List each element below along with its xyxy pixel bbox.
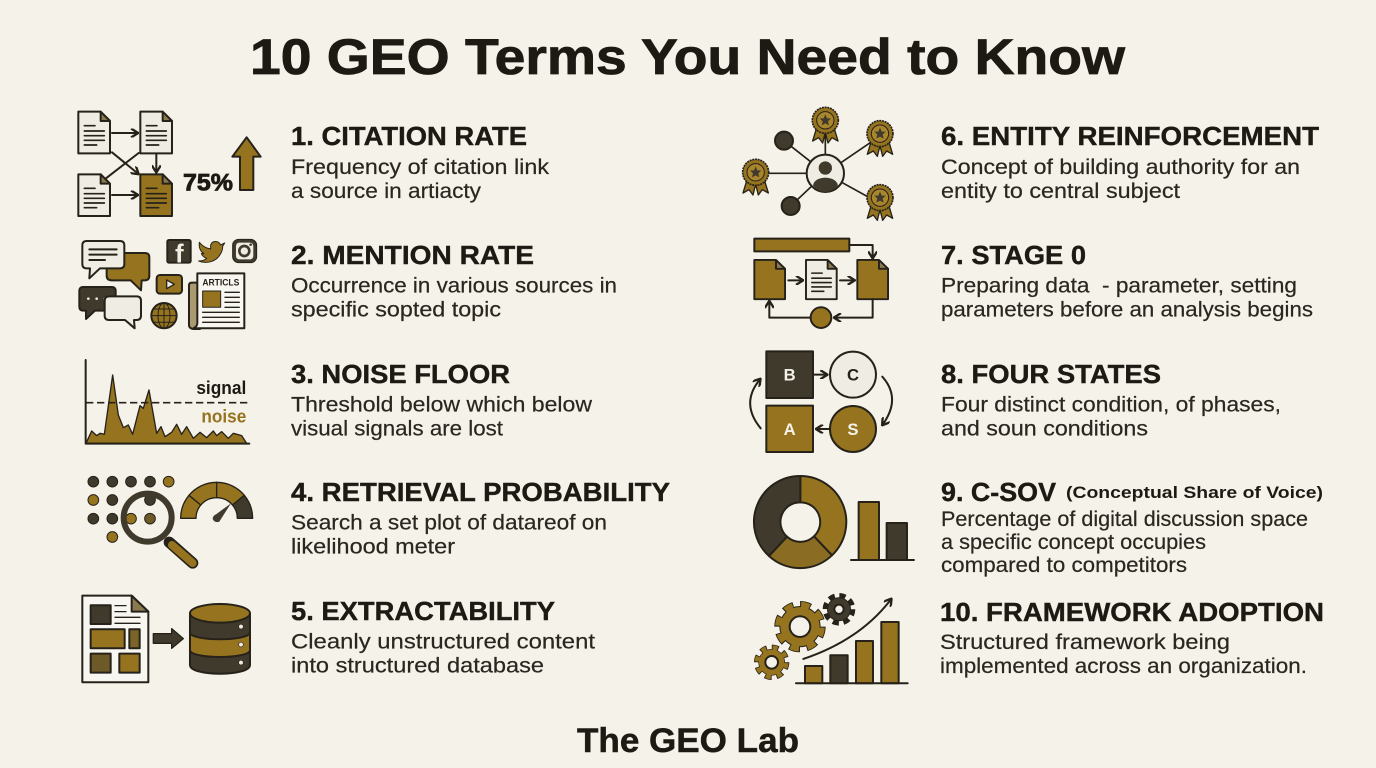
description: Structured framework being	[940, 631, 1230, 654]
description	[941, 394, 1281, 440]
description: Cleanly unstructured content	[291, 630, 595, 654]
description	[291, 394, 593, 440]
icon: gears and rising bars	[757, 596, 908, 683]
description: Frequency of citation link	[291, 156, 550, 179]
heading: 2. MENTION RATE	[291, 240, 534, 270]
icon: four-state cycle	[750, 351, 892, 452]
icon: signal and noise chart: noise	[201, 406, 246, 427]
description: into structured database	[291, 654, 544, 678]
heading	[941, 477, 1323, 507]
icon: donut chart and bars	[754, 476, 914, 568]
heading: 4. RETRIEVAL PROBABILITY	[291, 477, 670, 507]
description: implemented across an organization.	[940, 655, 1307, 678]
term 4: retrieval probability	[88, 476, 670, 563]
description	[941, 508, 1308, 577]
icon: four-state cycle: B	[784, 366, 796, 385]
icon: citation network with 75% arrow	[78, 112, 261, 216]
term 3: noise floor	[86, 359, 593, 444]
description: a source in artiacty	[291, 180, 482, 203]
footer brand: The GEO Lab	[577, 722, 799, 760]
description: and soun conditions	[941, 418, 1148, 440]
term 8: four states	[750, 351, 1281, 452]
term 2: mention rate	[79, 239, 617, 329]
description: likelihood meter	[291, 536, 455, 558]
description: Occurrence in various sources in	[291, 274, 617, 298]
heading: 6. ENTITY REINFORCEMENT	[941, 121, 1319, 151]
icon: four-state cycle: A	[784, 420, 796, 439]
heading: 8. FOUR STATES	[941, 359, 1161, 389]
description: visual signals are lost	[291, 418, 503, 440]
description	[291, 274, 617, 322]
title: 10 GEO Terms You Need to Know	[250, 29, 1125, 85]
description: a specific concept occupies	[941, 531, 1206, 554]
description: Concept of building authority for an	[941, 156, 1300, 179]
heading: (Conceptual Share of Voice)	[1066, 483, 1323, 502]
description	[941, 274, 1313, 322]
icon: four-state cycle: C	[847, 366, 859, 385]
description	[941, 156, 1300, 203]
term 1: citation rate	[78, 112, 550, 216]
icon: signal and noise chart: signal	[196, 377, 246, 398]
heading: 9. C-SOV	[941, 477, 1057, 507]
description	[940, 631, 1307, 678]
description: specific sopted topic	[291, 298, 501, 322]
description: Preparing data - parameter, setting	[941, 274, 1297, 298]
description: parameters before an analysis begins	[941, 298, 1313, 322]
heading: 1. CITATION RATE	[291, 121, 527, 151]
icon: four-state cycle: S	[847, 420, 859, 439]
icon: dot grid, magnifier and gauge	[88, 476, 253, 563]
heading: 7. STAGE 0	[941, 240, 1086, 270]
description	[291, 156, 550, 203]
icon: preparation workflow	[754, 239, 888, 328]
icon: entity hub with badges	[743, 107, 893, 220]
icon: signal and noise chart	[86, 360, 249, 444]
term 6: entity reinforcement	[743, 107, 1319, 220]
description	[291, 630, 595, 678]
description: entity to central subject	[941, 180, 1180, 203]
heading: 5. EXTRACTABILITY	[291, 596, 555, 626]
term 10: framework adoption	[757, 596, 1324, 683]
description	[291, 512, 607, 558]
term 9: C-SOV	[754, 476, 1323, 577]
description: Four distinct condition, of phases,	[941, 394, 1281, 416]
description: Search a set plot of datareof on	[291, 512, 607, 534]
heading: 10. FRAMEWORK ADOPTION	[940, 597, 1324, 627]
heading: 3. NOISE FLOOR	[291, 359, 510, 389]
icon: citation network with 75% arrow: 75%	[183, 170, 233, 197]
description: Threshold below which below	[291, 394, 593, 416]
description: compared to competitors	[941, 554, 1187, 577]
term 7: stage 0	[754, 239, 1313, 328]
description: Percentage of digital discussion space	[941, 508, 1308, 531]
icon: chat bubbles, social media and article: f	[175, 239, 184, 269]
icon: chat bubbles, social media and article	[79, 239, 257, 329]
icon: chat bubbles, social media and article: ARTICLS	[202, 278, 239, 288]
term 5: extractability	[82, 596, 595, 682]
icon: document to database	[82, 596, 250, 682]
